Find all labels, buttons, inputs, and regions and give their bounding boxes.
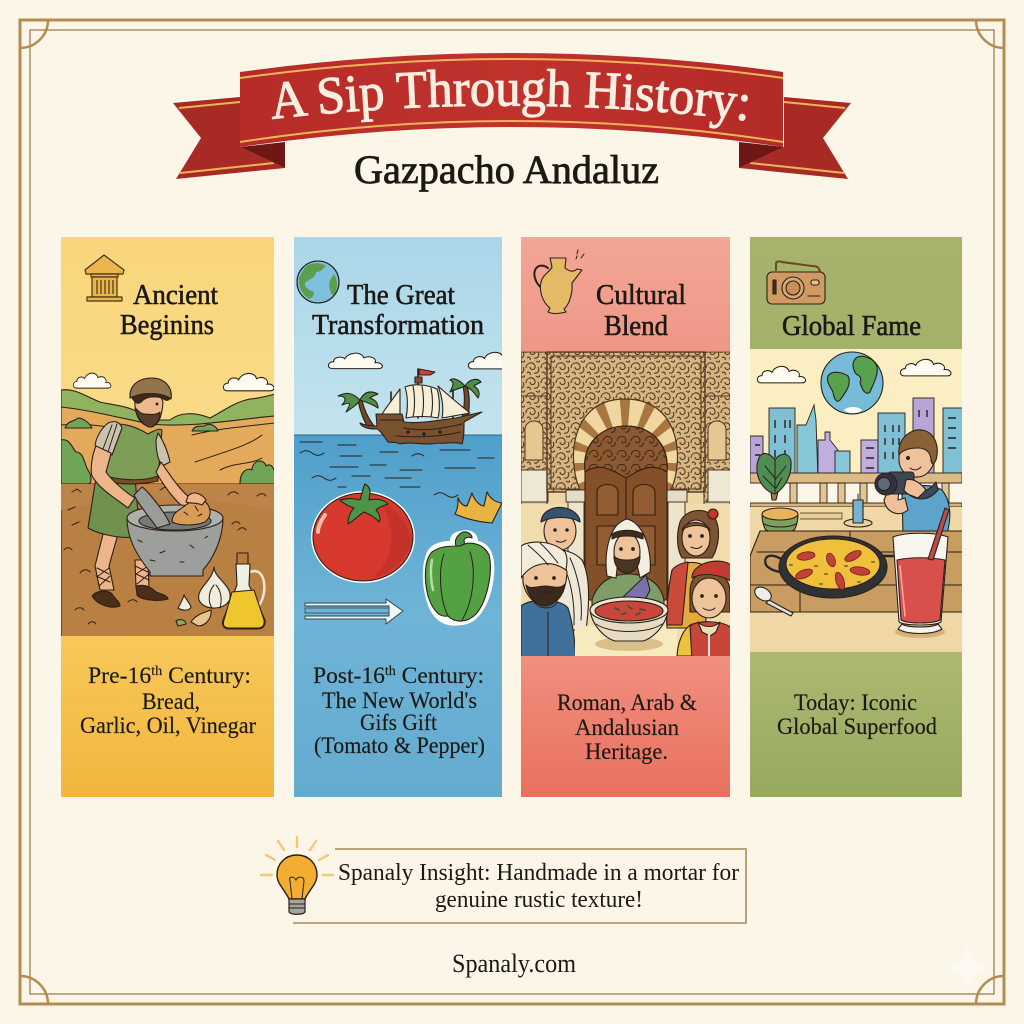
head xyxy=(130,378,171,427)
columns xyxy=(566,490,687,602)
ribbon left tail xyxy=(173,97,285,179)
heading: The Great xyxy=(347,280,455,311)
panel: global fame xyxy=(750,237,964,797)
ground xyxy=(61,484,275,640)
city skyline xyxy=(750,398,963,480)
legs and sandals xyxy=(92,534,168,607)
wooden table xyxy=(750,531,964,612)
side ornaments xyxy=(521,352,734,508)
camera xyxy=(888,472,914,494)
pepper xyxy=(423,530,494,626)
icon: greek temple xyxy=(85,255,124,301)
ship masts xyxy=(391,369,453,418)
photographer xyxy=(875,430,950,534)
heading: Blend xyxy=(604,311,668,342)
person: man with cap xyxy=(535,508,589,630)
ribbon right tail xyxy=(739,97,851,179)
description: Garlic, Oil, Vinegar xyxy=(80,713,256,739)
description: Pre-16 xyxy=(88,663,151,689)
arm holding camera xyxy=(884,488,908,514)
description: Bread, xyxy=(142,689,200,715)
gazpacho glass xyxy=(893,508,949,638)
icon: retro camera xyxy=(767,261,825,304)
horseshoe arch voussoirs xyxy=(553,390,697,503)
description xyxy=(80,663,256,739)
heading xyxy=(596,280,686,342)
clouds xyxy=(73,373,274,391)
ship xyxy=(360,369,482,444)
callout box outline xyxy=(293,849,746,923)
ribbon folds xyxy=(240,142,784,168)
left palm xyxy=(338,392,378,428)
sleeves xyxy=(95,422,170,466)
panel: cultural blend xyxy=(521,237,734,797)
person: bearded man with turban xyxy=(521,542,576,660)
heading: Ancient xyxy=(133,280,218,311)
bushes xyxy=(61,418,276,484)
insight callout xyxy=(261,837,746,923)
panel: the great transformation xyxy=(294,237,521,797)
sky xyxy=(750,349,962,479)
wall base xyxy=(521,351,730,504)
description: Century: xyxy=(162,663,251,689)
ribbon main band xyxy=(240,53,783,147)
icon: clay jug xyxy=(534,250,584,314)
clouds xyxy=(757,359,951,383)
table xyxy=(575,624,677,660)
olive oil bottle xyxy=(222,553,265,629)
paella pan xyxy=(765,536,896,598)
heading xyxy=(312,280,484,341)
gazpacho bowl xyxy=(590,597,668,651)
description: Post-16 xyxy=(313,663,385,689)
description: (Tomato & Pepper) xyxy=(314,733,485,759)
subtitle: Gazpacho Andaluz xyxy=(354,147,659,192)
description xyxy=(777,690,937,740)
globe xyxy=(821,352,883,414)
description: Global Superfood xyxy=(777,714,937,740)
description: Roman, Arab & xyxy=(557,690,697,716)
belt xyxy=(105,476,158,484)
illustration: man grinding in mortar xyxy=(61,373,276,640)
description: Gifs Gift xyxy=(360,710,437,736)
bread crumbs xyxy=(172,500,210,525)
candle and saucer xyxy=(844,494,872,527)
balustrade xyxy=(750,473,962,507)
panel: ancient beginnings xyxy=(61,237,276,797)
callout text: genuine rustic texture! xyxy=(435,887,643,913)
callout text xyxy=(338,860,739,913)
building windows xyxy=(755,410,956,468)
right palm xyxy=(450,379,481,418)
callout text: Spanaly Insight: Handmade in a mortar for xyxy=(338,860,739,886)
description: Century: xyxy=(396,663,484,689)
pestle xyxy=(134,487,170,528)
description xyxy=(313,663,485,759)
garlic xyxy=(176,567,230,626)
sparkle watermark xyxy=(944,945,990,990)
spoon xyxy=(752,584,793,616)
person: man in white headdress xyxy=(592,519,664,615)
mortar xyxy=(127,505,223,576)
person: girl with red cap xyxy=(677,561,732,660)
icon: light bulb xyxy=(261,837,333,914)
description: Andalusian xyxy=(575,715,679,741)
icon: globe xyxy=(297,261,339,303)
hills xyxy=(61,389,274,424)
icon: crown xyxy=(455,492,502,523)
sea waves xyxy=(294,434,502,436)
heading xyxy=(120,280,218,341)
ship hull xyxy=(360,412,482,444)
heading: Beginins xyxy=(120,310,214,341)
camera strap xyxy=(908,482,938,499)
hand on bread xyxy=(186,493,206,505)
heading: Transformation xyxy=(312,310,484,341)
illustration: ship and new world produce xyxy=(294,352,521,626)
description: The New World's xyxy=(322,688,477,714)
illustration: photographer, paella and gazpacho xyxy=(750,349,964,655)
carved door xyxy=(585,426,667,600)
person: woman with flower xyxy=(667,509,719,628)
illustration: moorish doorway and people xyxy=(521,351,734,660)
description: th xyxy=(385,664,396,679)
green bowl xyxy=(762,508,798,538)
description xyxy=(557,690,697,765)
description: Heritage. xyxy=(585,739,668,765)
hand on camera xyxy=(904,479,926,498)
title text: A Sip Through History: xyxy=(272,68,748,129)
tunic skirt xyxy=(88,478,140,537)
fields xyxy=(61,407,275,490)
wall below ornate panel xyxy=(521,504,730,656)
arrow xyxy=(305,599,403,624)
heading: Cultural xyxy=(596,280,686,311)
title ribbon banner xyxy=(173,53,851,179)
footer brand: Spanaly.com xyxy=(452,949,576,978)
tomato xyxy=(311,484,415,583)
description: th xyxy=(151,664,162,679)
ornate panel above arch xyxy=(547,352,705,492)
paper on table xyxy=(800,513,842,519)
plant xyxy=(757,453,791,500)
arms xyxy=(90,446,188,508)
terrace floor xyxy=(750,507,962,655)
t-shirt xyxy=(902,486,950,534)
ship sails xyxy=(405,385,439,418)
head xyxy=(899,433,935,477)
description: Today: Iconic xyxy=(794,690,917,716)
heading: Global Fame xyxy=(782,311,921,342)
ship flag xyxy=(419,369,435,375)
clouds xyxy=(328,352,521,369)
tunic torso xyxy=(104,424,162,481)
